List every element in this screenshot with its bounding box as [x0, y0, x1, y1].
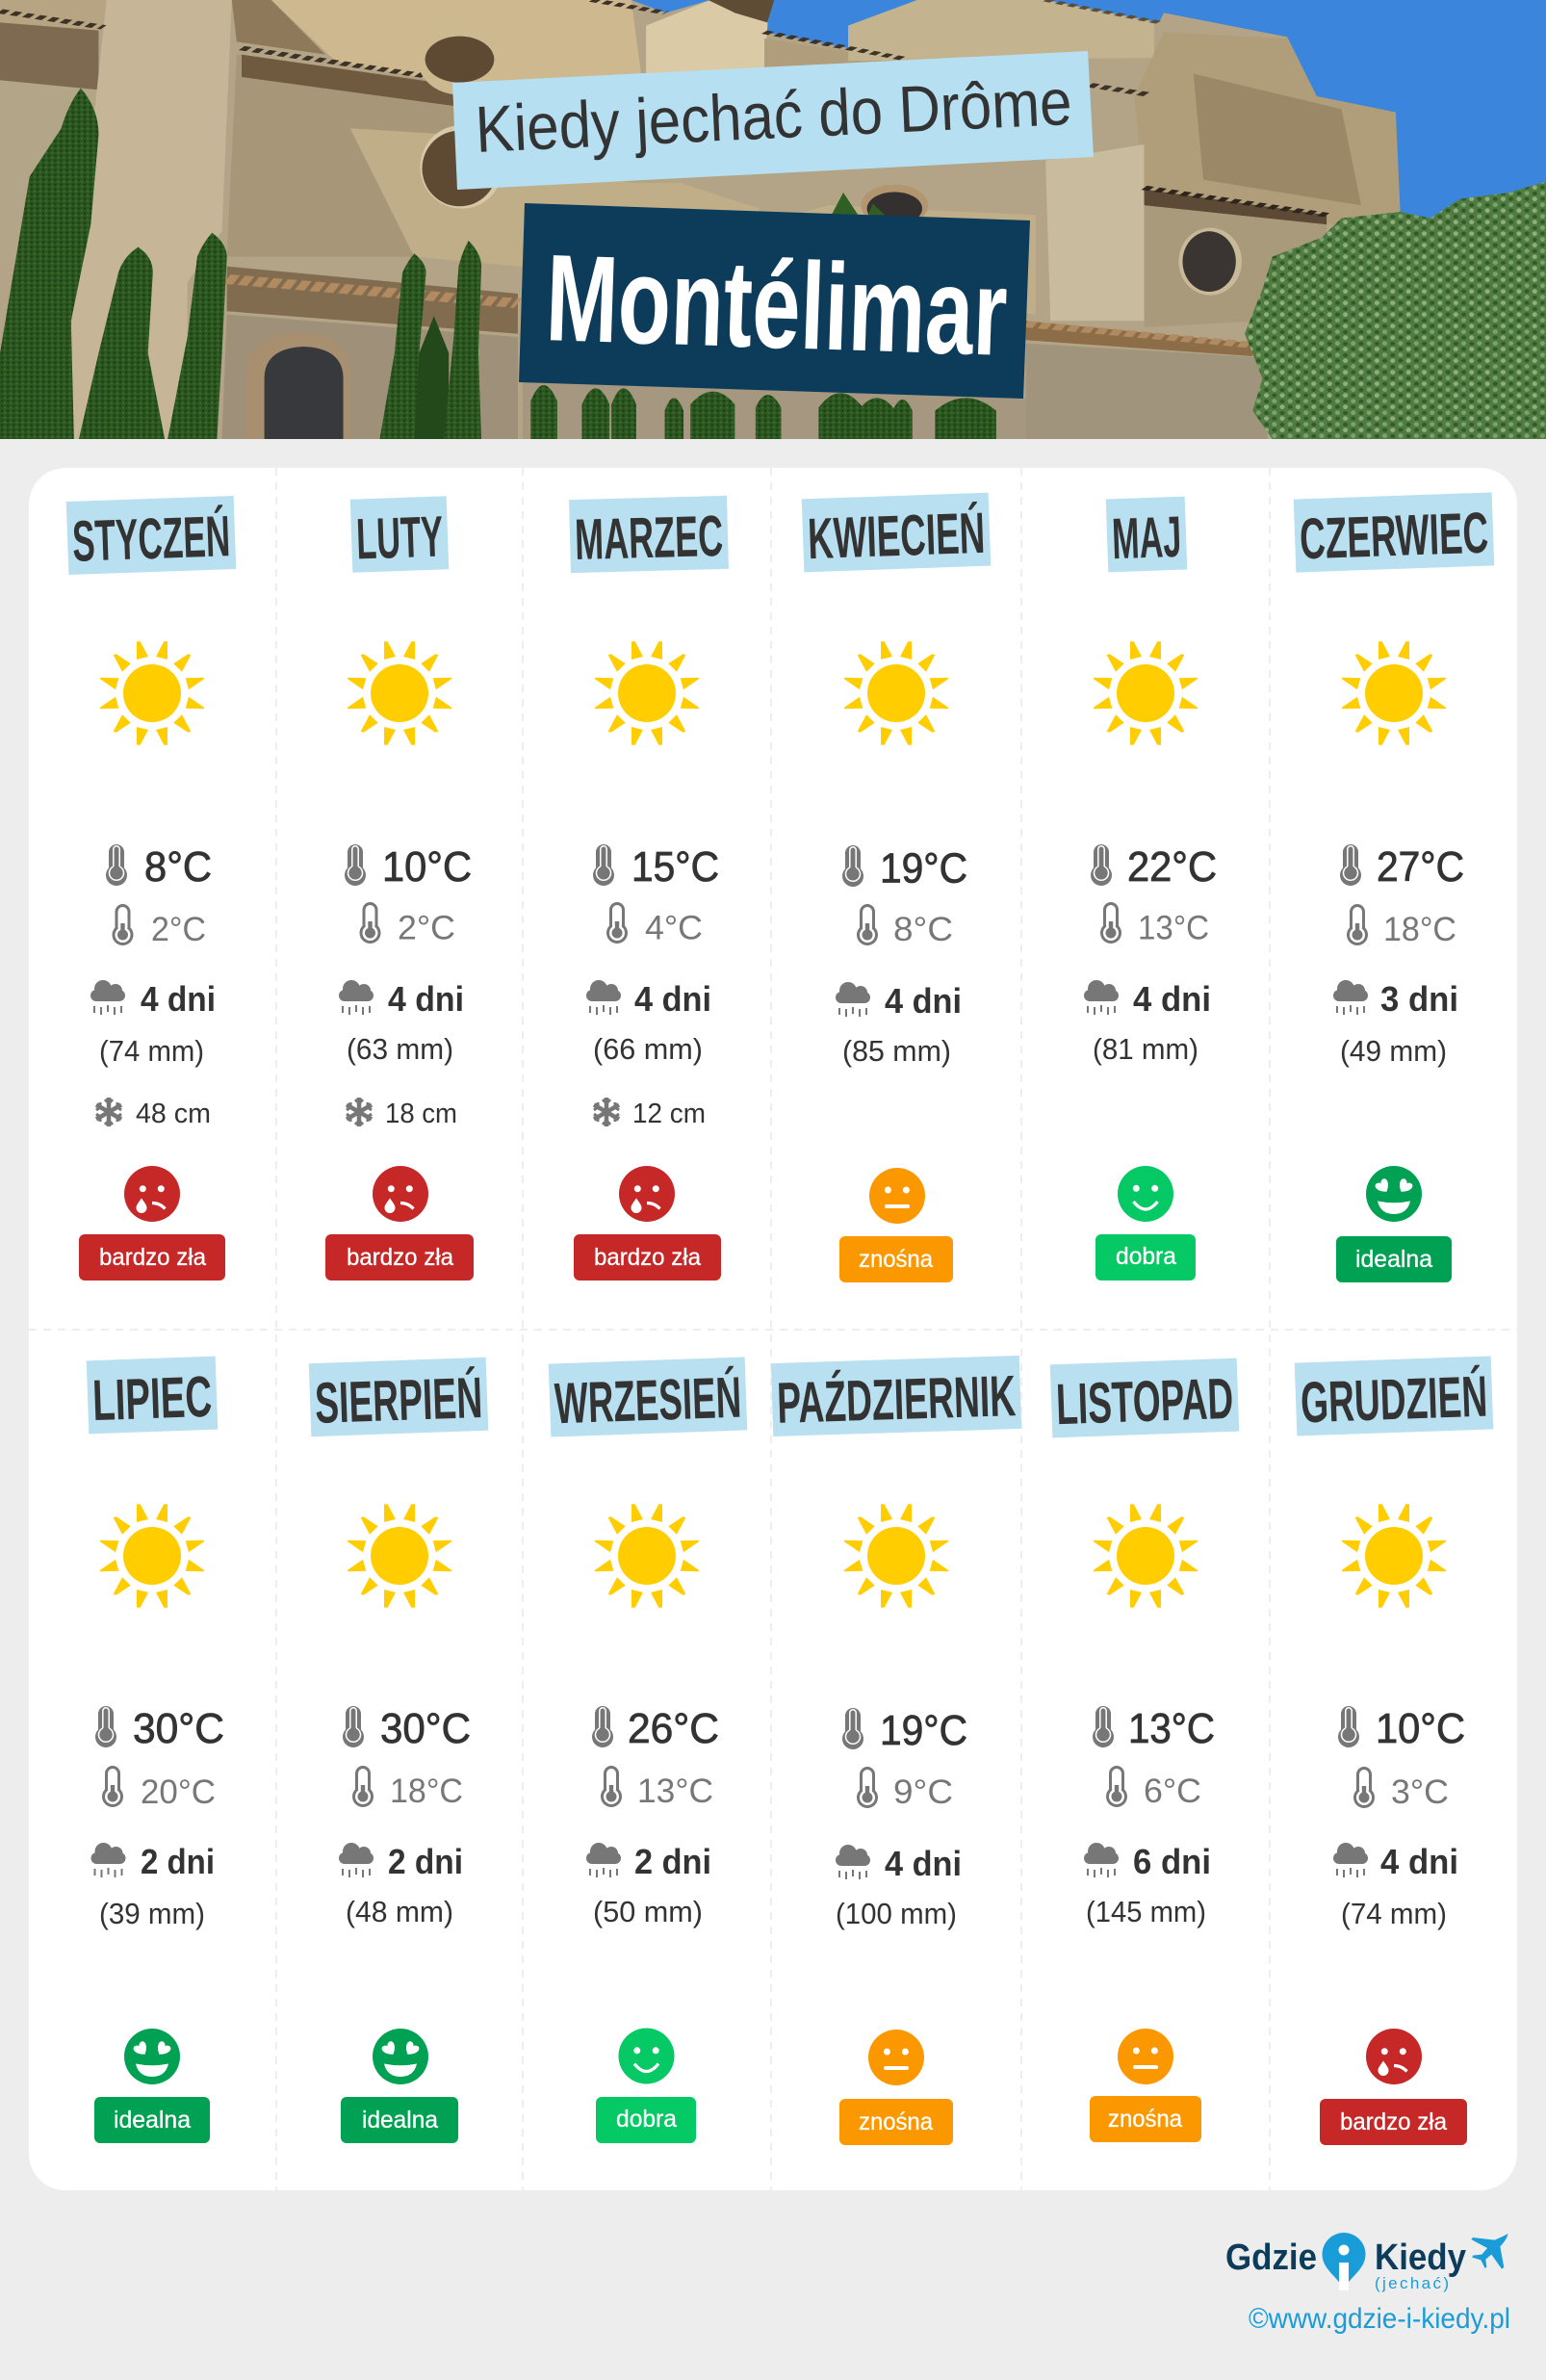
month label: LUTY [355, 504, 444, 572]
low temperature: 20°C [141, 1773, 216, 1811]
rating badge: idealna [362, 2107, 438, 2134]
icon: thermometer low [1353, 1767, 1375, 1808]
rainy days: 4 dni [141, 979, 216, 1019]
month label: LIPIEC [91, 1364, 213, 1433]
icon: snowflake [347, 1098, 372, 1126]
low temperature: 4°C [645, 909, 703, 947]
month label: LISTOPAD [1055, 1366, 1234, 1436]
rainy days: 4 dni [885, 981, 962, 1021]
logo: Gdzie i Kiedy: Kiedy [1375, 2238, 1466, 2278]
month: sierpień [309, 1358, 488, 2143]
icon: snowflake [96, 1098, 121, 1126]
snowfall: 48 cm [136, 1099, 211, 1129]
icon: rain cloud [836, 1845, 870, 1879]
low temperature: 9°C [893, 1773, 953, 1811]
icon: thermometer high [1093, 1706, 1114, 1747]
icon: tolerable face [868, 2030, 924, 2085]
icon: rain cloud [836, 982, 870, 1017]
icon: thermometer low [606, 902, 628, 944]
rainy days: 4 dni [885, 1844, 962, 1883]
month: marzec [569, 496, 729, 1281]
rating badge [1095, 1234, 1196, 1281]
rainfall: (81 mm) [1093, 1032, 1198, 1066]
month label: KWIECIEŃ [807, 501, 986, 571]
rating badge [1090, 2096, 1201, 2142]
icon: rain cloud [586, 980, 621, 1015]
rainfall: (100 mm) [836, 1897, 957, 1930]
website url: ©www.gdzie-i-kiedy.pl [1249, 2303, 1510, 2335]
icon: thermometer low [601, 1766, 622, 1807]
snowfall: 12 cm [632, 1099, 706, 1129]
icon: rain cloud [90, 980, 125, 1015]
icon: thermometer high [1091, 844, 1112, 886]
rainy days: 3 dni [1380, 979, 1458, 1019]
logo: Gdzie i Kiedy [1225, 2233, 1508, 2292]
high temperature: 10°C [382, 843, 472, 891]
icon: rain cloud [90, 1843, 125, 1877]
month: luty [325, 496, 474, 1281]
icon: very bad face [1366, 2029, 1422, 2084]
icon: very bad face [124, 1166, 180, 1222]
logo: Gdzie i Kiedy: (jechać) [1375, 2274, 1449, 2292]
icon: thermometer high [343, 1706, 364, 1747]
low temperature: 13°C [637, 1772, 713, 1810]
rating badge: dobra [616, 2106, 677, 2133]
icon: thermometer high [1340, 844, 1361, 886]
rating badge [1336, 1236, 1452, 1282]
icon: rain cloud [1333, 1843, 1368, 1877]
rainy days: 4 dni [1133, 979, 1211, 1019]
rating badge: idealna [114, 2107, 191, 2134]
icon: thermometer low [360, 902, 381, 944]
banner: Kiedy jechać do Drôme: Kiedy jechać do Drôme [474, 65, 1073, 167]
rainfall: (85 mm) [842, 1034, 951, 1068]
icon: sun [348, 1504, 451, 1608]
rating badge [341, 2097, 458, 2143]
rainy days: 2 dni [634, 1842, 711, 1881]
month: czerwiec [1294, 492, 1494, 1282]
month: październik [771, 1356, 1021, 2145]
icon: thermometer high [842, 845, 863, 887]
icon: ideal face [124, 2029, 180, 2084]
banner: Kiedy jechać do Drôme [452, 51, 1094, 190]
icon: sun [1094, 1504, 1198, 1608]
icon: thermometer low [1347, 904, 1368, 945]
banner: Montélimar: Montélimar [544, 229, 1010, 382]
low temperature: 8°C [893, 911, 953, 948]
icon: rain cloud [586, 1843, 621, 1877]
rainfall: (48 mm) [346, 1895, 453, 1928]
icon: very bad face [619, 1166, 675, 1222]
rainfall: (145 mm) [1086, 1895, 1206, 1928]
month label [802, 493, 991, 572]
header photo: Montélimar church [0, 0, 1546, 439]
icon: sun [1342, 641, 1446, 745]
rating badge [325, 1234, 474, 1281]
icon: sun [348, 641, 451, 745]
rainfall: (50 mm) [593, 1895, 703, 1928]
month label: SIERPIEŃ [314, 1365, 483, 1436]
month label [549, 1357, 747, 1437]
high temperature: 15°C [631, 843, 719, 891]
rating badge [596, 2097, 696, 2143]
rating badge [839, 2099, 953, 2145]
rainy days: 4 dni [634, 979, 711, 1019]
rating badge: idealna [1355, 1246, 1432, 1273]
icon: thermometer high [345, 844, 366, 886]
rainy days: 6 dni [1133, 1842, 1211, 1881]
low temperature: 18°C [390, 1772, 463, 1810]
logo: Gdzie i Kiedy: Gdzie [1225, 2238, 1317, 2278]
icon: sun [595, 1504, 699, 1608]
rating badge: dobra [1116, 1243, 1176, 1270]
rainfall: (66 mm) [593, 1032, 703, 1066]
icon: sun [595, 641, 699, 745]
icon: sun [100, 1504, 204, 1608]
icon: snowflake [594, 1098, 619, 1126]
high temperature: 22°C [1127, 843, 1217, 891]
high temperature: 26°C [628, 1705, 719, 1752]
icon: thermometer low [1100, 902, 1121, 944]
icon: rain cloud [1084, 980, 1119, 1015]
high temperature: 13°C [1128, 1705, 1215, 1752]
month: kwiecień [802, 493, 991, 1282]
month label [350, 496, 449, 573]
icon: rain cloud [1084, 1843, 1119, 1877]
rating badge: bardzo zła [347, 1244, 453, 1271]
icon: thermometer low [857, 904, 878, 945]
rating badge [574, 1234, 721, 1281]
rating badge: znośna [859, 2108, 933, 2135]
icon: rain cloud [339, 980, 374, 1015]
high temperature: 30°C [133, 1705, 224, 1752]
rating badge: bardzo zła [1340, 2108, 1447, 2135]
icon: sun [1094, 641, 1198, 745]
month label: MAJ [1111, 504, 1182, 571]
month label [569, 496, 729, 573]
icon: thermometer low [857, 1767, 878, 1808]
low temperature: 18°C [1383, 911, 1456, 948]
icon: tolerable face [869, 1168, 925, 1224]
month label [1050, 1358, 1239, 1437]
icon: thermometer low [102, 1766, 123, 1807]
high temperature: 27°C [1377, 843, 1464, 891]
low temperature: 13°C [1138, 909, 1209, 947]
icon: rain cloud [339, 1843, 374, 1877]
month label: MARZEC [574, 504, 724, 572]
rainy days: 2 dni [141, 1842, 215, 1881]
rating badge: bardzo zła [99, 1244, 206, 1271]
month: styczeń [66, 496, 236, 1281]
high temperature: 30°C [380, 1705, 471, 1752]
month: wrzesień [549, 1357, 747, 2143]
icon: thermometer low [112, 904, 133, 945]
icon: thermometer high [1338, 1706, 1359, 1747]
month: listopad [1050, 1358, 1239, 2142]
icon: thermometer high [842, 1708, 863, 1749]
icon: thermometer low [1106, 1766, 1127, 1807]
month label [66, 496, 236, 575]
icon: thermometer high [95, 1706, 116, 1747]
snowfall: 18 cm [385, 1099, 457, 1129]
icon: ideal face [1366, 1166, 1422, 1222]
icon: sun [1342, 1504, 1446, 1608]
low temperature: 6°C [1144, 1772, 1201, 1810]
icon: rain cloud [1333, 980, 1368, 1015]
icon: thermometer high [592, 1706, 613, 1747]
month label [771, 1356, 1021, 1436]
banner: Montélimar [519, 203, 1030, 399]
month: grudzień [1295, 1356, 1493, 2145]
rating badge: znośna [1108, 2106, 1182, 2133]
icon: sun [100, 641, 204, 745]
low temperature: 3°C [1391, 1773, 1449, 1811]
month label: PAŹDZIERNIK [776, 1363, 1017, 1436]
icon: good face [1118, 1166, 1173, 1222]
rainfall: (49 mm) [1340, 1034, 1447, 1068]
icon: sun [844, 641, 948, 745]
rating badge [839, 1236, 953, 1282]
rainfall: (74 mm) [99, 1034, 204, 1068]
rainy days: 4 dni [388, 979, 464, 1019]
rainy days: 2 dni [388, 1842, 463, 1881]
low temperature: 2°C [398, 909, 455, 947]
icon: very bad face [373, 1166, 428, 1222]
rainfall: (63 mm) [347, 1032, 453, 1066]
high temperature: 19°C [880, 845, 967, 892]
rating badge [94, 2097, 210, 2143]
panel: months grid [29, 468, 1517, 2190]
icon: thermometer low [352, 1766, 374, 1807]
month: lipiec [87, 1357, 224, 2143]
rating badge [1320, 2099, 1467, 2145]
icon: good face [618, 2028, 674, 2083]
rating badge: bardzo zła [594, 1244, 701, 1271]
icon: airplane [1471, 2234, 1508, 2269]
month label [309, 1358, 488, 1436]
month: maj [1084, 497, 1217, 1281]
rating badge: znośna [859, 1246, 933, 1273]
month label [87, 1357, 218, 1434]
rating badge [79, 1234, 225, 1281]
month label: WRZESIEŃ [554, 1365, 742, 1436]
icon: thermometer high [593, 844, 614, 886]
rainy days: 4 dni [1380, 1842, 1458, 1881]
month label [1106, 497, 1187, 572]
icon: map pin [1323, 2233, 1365, 2290]
icon: ideal face [373, 2029, 428, 2084]
rainfall: (39 mm) [99, 1897, 205, 1930]
icon: tolerable face [1118, 2029, 1173, 2084]
high temperature: 10°C [1376, 1705, 1465, 1752]
icon: sun [844, 1504, 948, 1608]
rainfall: (74 mm) [1341, 1897, 1447, 1930]
month label: STYCZEŃ [71, 504, 231, 574]
icon: thermometer high [106, 844, 127, 886]
high temperature: 8°C [144, 843, 212, 891]
high temperature: 19°C [880, 1707, 967, 1754]
low temperature: 2°C [151, 911, 206, 948]
